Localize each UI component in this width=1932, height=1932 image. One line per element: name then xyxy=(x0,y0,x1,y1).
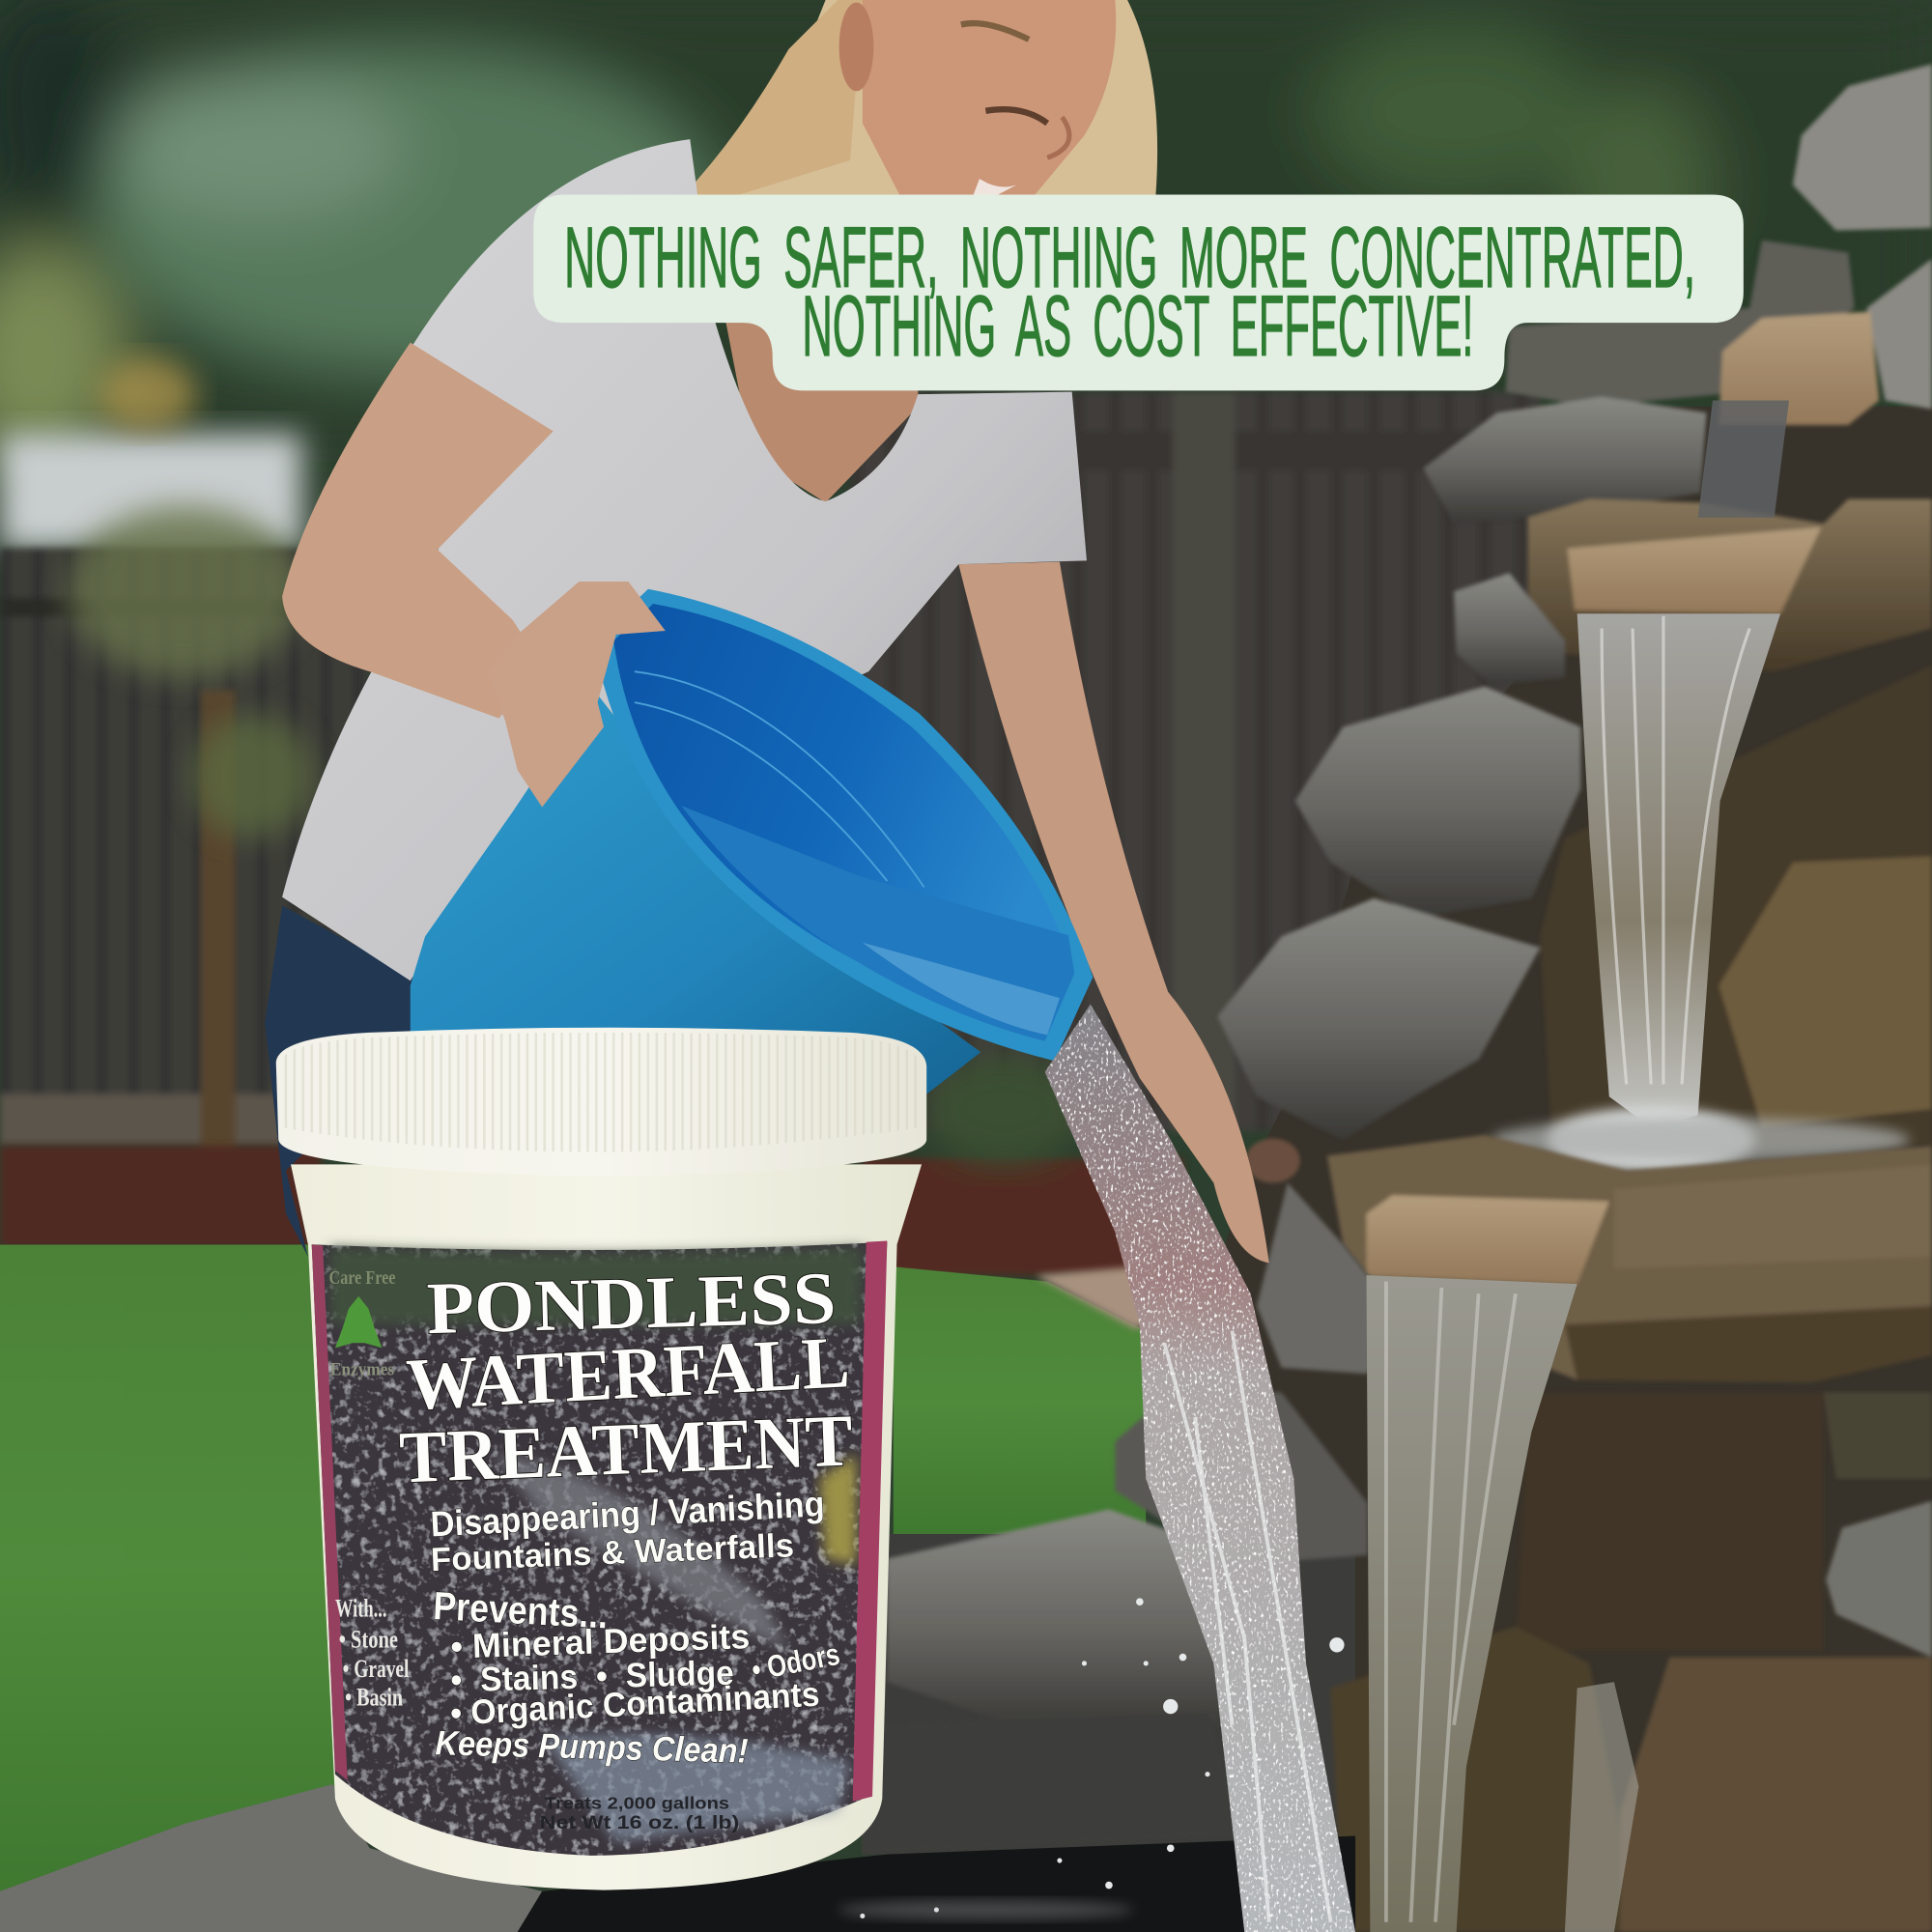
product name: TREATMENT xyxy=(398,1399,854,1498)
headline text xyxy=(564,209,1695,374)
prevents list: Keeps Pumps Clean! xyxy=(435,1723,749,1771)
water droplets xyxy=(860,1598,1345,1918)
lawn xyxy=(0,1244,1182,1897)
pouring water stream xyxy=(838,1005,1355,1932)
with list: • Gravel xyxy=(343,1654,409,1683)
net weight: Net Wt 16 oz. (1 lb) xyxy=(540,1813,739,1833)
prevents list: Prevents... xyxy=(432,1583,610,1636)
product use: Disappearing / Vanishing xyxy=(430,1484,825,1545)
trees xyxy=(0,0,1932,469)
right arm xyxy=(958,562,1269,1263)
product name: PONDLESS xyxy=(426,1257,837,1350)
lower rocks xyxy=(863,1182,1932,1932)
mid rocks xyxy=(1217,666,1932,1146)
brand frog mark xyxy=(329,1267,395,1379)
sapling xyxy=(68,357,314,1171)
callout bubble xyxy=(533,195,1744,390)
lower ledge xyxy=(1246,1135,1932,1382)
bucket interior xyxy=(613,604,1074,1041)
lower waterfall xyxy=(1367,1275,1638,1932)
net weight: Treats 2,000 gallons xyxy=(545,1793,729,1812)
bucket body xyxy=(411,690,980,1094)
prevents list: • Organic Contaminants xyxy=(449,1675,820,1733)
with list xyxy=(335,1593,409,1711)
left fence xyxy=(0,549,370,1146)
woman pouring water xyxy=(265,0,1269,1263)
pink stripe right xyxy=(853,1240,887,1802)
left arm xyxy=(282,343,554,719)
prevents list: • Stains • Sludge xyxy=(450,1654,734,1699)
blue bucket xyxy=(411,589,1093,1094)
product use: Fountains & Waterfalls xyxy=(430,1527,795,1578)
jeans xyxy=(265,906,419,1257)
jar body xyxy=(291,1164,922,1890)
with list: With... xyxy=(335,1593,387,1622)
shirt xyxy=(282,139,1087,980)
jar label xyxy=(312,1240,887,1856)
label artwork xyxy=(312,1240,887,1856)
with list: • Stone xyxy=(339,1624,398,1653)
product name: WATERFALL xyxy=(405,1321,852,1426)
mulch bed xyxy=(0,1054,1182,1275)
chest skin xyxy=(702,200,918,502)
hair xyxy=(684,0,1157,197)
bucket rim xyxy=(594,589,1093,1061)
upper waterfalls xyxy=(1491,401,1910,1172)
face xyxy=(839,0,1116,195)
pale house wall xyxy=(0,434,301,550)
upper rocks xyxy=(1423,64,1932,685)
prevents list xyxy=(432,1583,842,1771)
headline callout xyxy=(533,195,1744,390)
water sheen xyxy=(863,943,1060,1035)
with list: • Basin xyxy=(345,1682,403,1711)
pink stripe left xyxy=(312,1244,348,1780)
prevents list: • Mineral Deposits xyxy=(450,1617,751,1666)
net weight xyxy=(540,1793,739,1833)
jar lid xyxy=(276,1028,926,1177)
product name xyxy=(398,1257,854,1498)
hand gripping bucket xyxy=(487,582,666,807)
bottom stone edge and pool xyxy=(0,1784,1355,1932)
brand frog mark: Enzymes xyxy=(330,1359,394,1379)
product use xyxy=(430,1484,825,1578)
product jar xyxy=(276,1028,926,1890)
brand frog mark: Care Free xyxy=(329,1267,395,1289)
right fence xyxy=(850,392,1540,1131)
rock fountain xyxy=(863,64,1932,1932)
inner ridges xyxy=(635,671,924,887)
prevents list: • Odors xyxy=(749,1636,842,1688)
water inside bucket xyxy=(681,806,1074,1041)
